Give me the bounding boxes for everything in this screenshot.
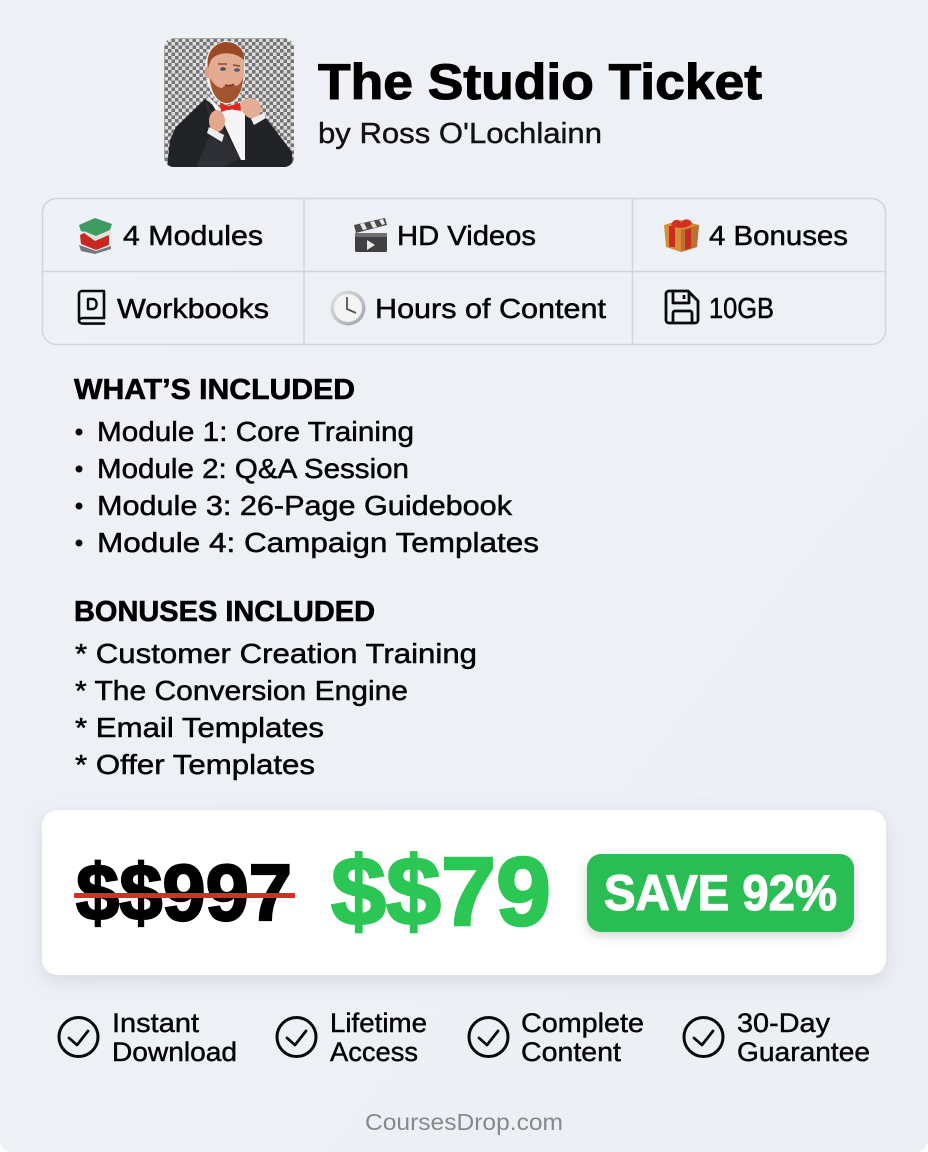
strikethrough <box>74 893 295 898</box>
heading: bonuses included: BONUSES INCLUDED <box>74 596 375 628</box>
feature: lifetime access: Lifetime <box>330 1008 427 1038</box>
feature: complete content: Content <box>521 1037 622 1067</box>
list: modules <box>76 416 539 558</box>
feature table <box>42 198 886 344</box>
portrait: suit shading <box>196 100 240 168</box>
footer site name: CoursesDrop.com <box>365 1109 563 1135</box>
save badge: SAVE 92% <box>604 865 837 921</box>
feature: instant download <box>59 1008 237 1067</box>
icon: floppy disk <box>666 291 698 323</box>
portrait photo <box>164 38 294 168</box>
feature: lifetime access: Access <box>330 1037 418 1067</box>
feature: lifetime access <box>277 1008 427 1067</box>
cell: Workbooks: Workbooks <box>117 293 269 324</box>
title: The Studio Ticket <box>318 54 762 110</box>
list: modules: Module 2: Q&A Session <box>97 453 409 484</box>
portrait: head <box>204 41 245 104</box>
pricing card <box>42 810 886 975</box>
list: bonuses: * Email Templates <box>75 712 324 743</box>
author line: by Ross O'Lochlainn <box>318 118 602 150</box>
feature: 30-day guarantee <box>684 1008 870 1067</box>
list: modules: Module 3: 26-Page Guidebook <box>97 490 513 521</box>
list: modules: Module 4: Campaign Templates <box>97 527 539 558</box>
cell: 4 Modules: 4 Modules <box>123 220 263 251</box>
feature: 30-day guarantee: Guarantee <box>737 1037 870 1067</box>
list: bonuses <box>75 638 477 780</box>
cell: 4 Bonuses: 4 Bonuses <box>709 220 848 251</box>
old price: $$997 <box>76 848 292 937</box>
portrait: suit <box>167 99 293 168</box>
feature: instant download: Instant <box>112 1008 200 1038</box>
icon: gift <box>664 219 699 252</box>
list: bonuses: * The Conversion Engine <box>75 675 408 706</box>
list: bonuses: * Offer Templates <box>75 749 315 780</box>
icon: clock <box>330 290 366 326</box>
feature: complete content: Complete <box>521 1008 644 1038</box>
save badge <box>587 854 854 932</box>
feature: complete content <box>469 1008 644 1067</box>
icon: books <box>79 218 112 254</box>
icon: clapperboard <box>354 218 387 252</box>
portrait: shirt <box>206 94 245 160</box>
icon: workbook <box>79 291 104 324</box>
list: bonuses: * Customer Creation Training <box>75 638 477 669</box>
cell: Hours of Content: Hours of Content <box>375 293 606 324</box>
cell: HD Videos: HD Videos <box>397 220 536 251</box>
heading: what's included: WHAT’S INCLUDED <box>74 374 355 406</box>
new price: $$79 <box>331 837 551 946</box>
portrait: bow tie <box>220 103 241 112</box>
list: modules: Module 1: Core Training <box>97 416 414 447</box>
cell: 10GB: 10GB <box>709 293 774 325</box>
feature: instant download: Download <box>112 1037 237 1067</box>
feature: 30-day guarantee: 30-Day <box>737 1008 831 1038</box>
portrait: hands <box>207 98 266 142</box>
